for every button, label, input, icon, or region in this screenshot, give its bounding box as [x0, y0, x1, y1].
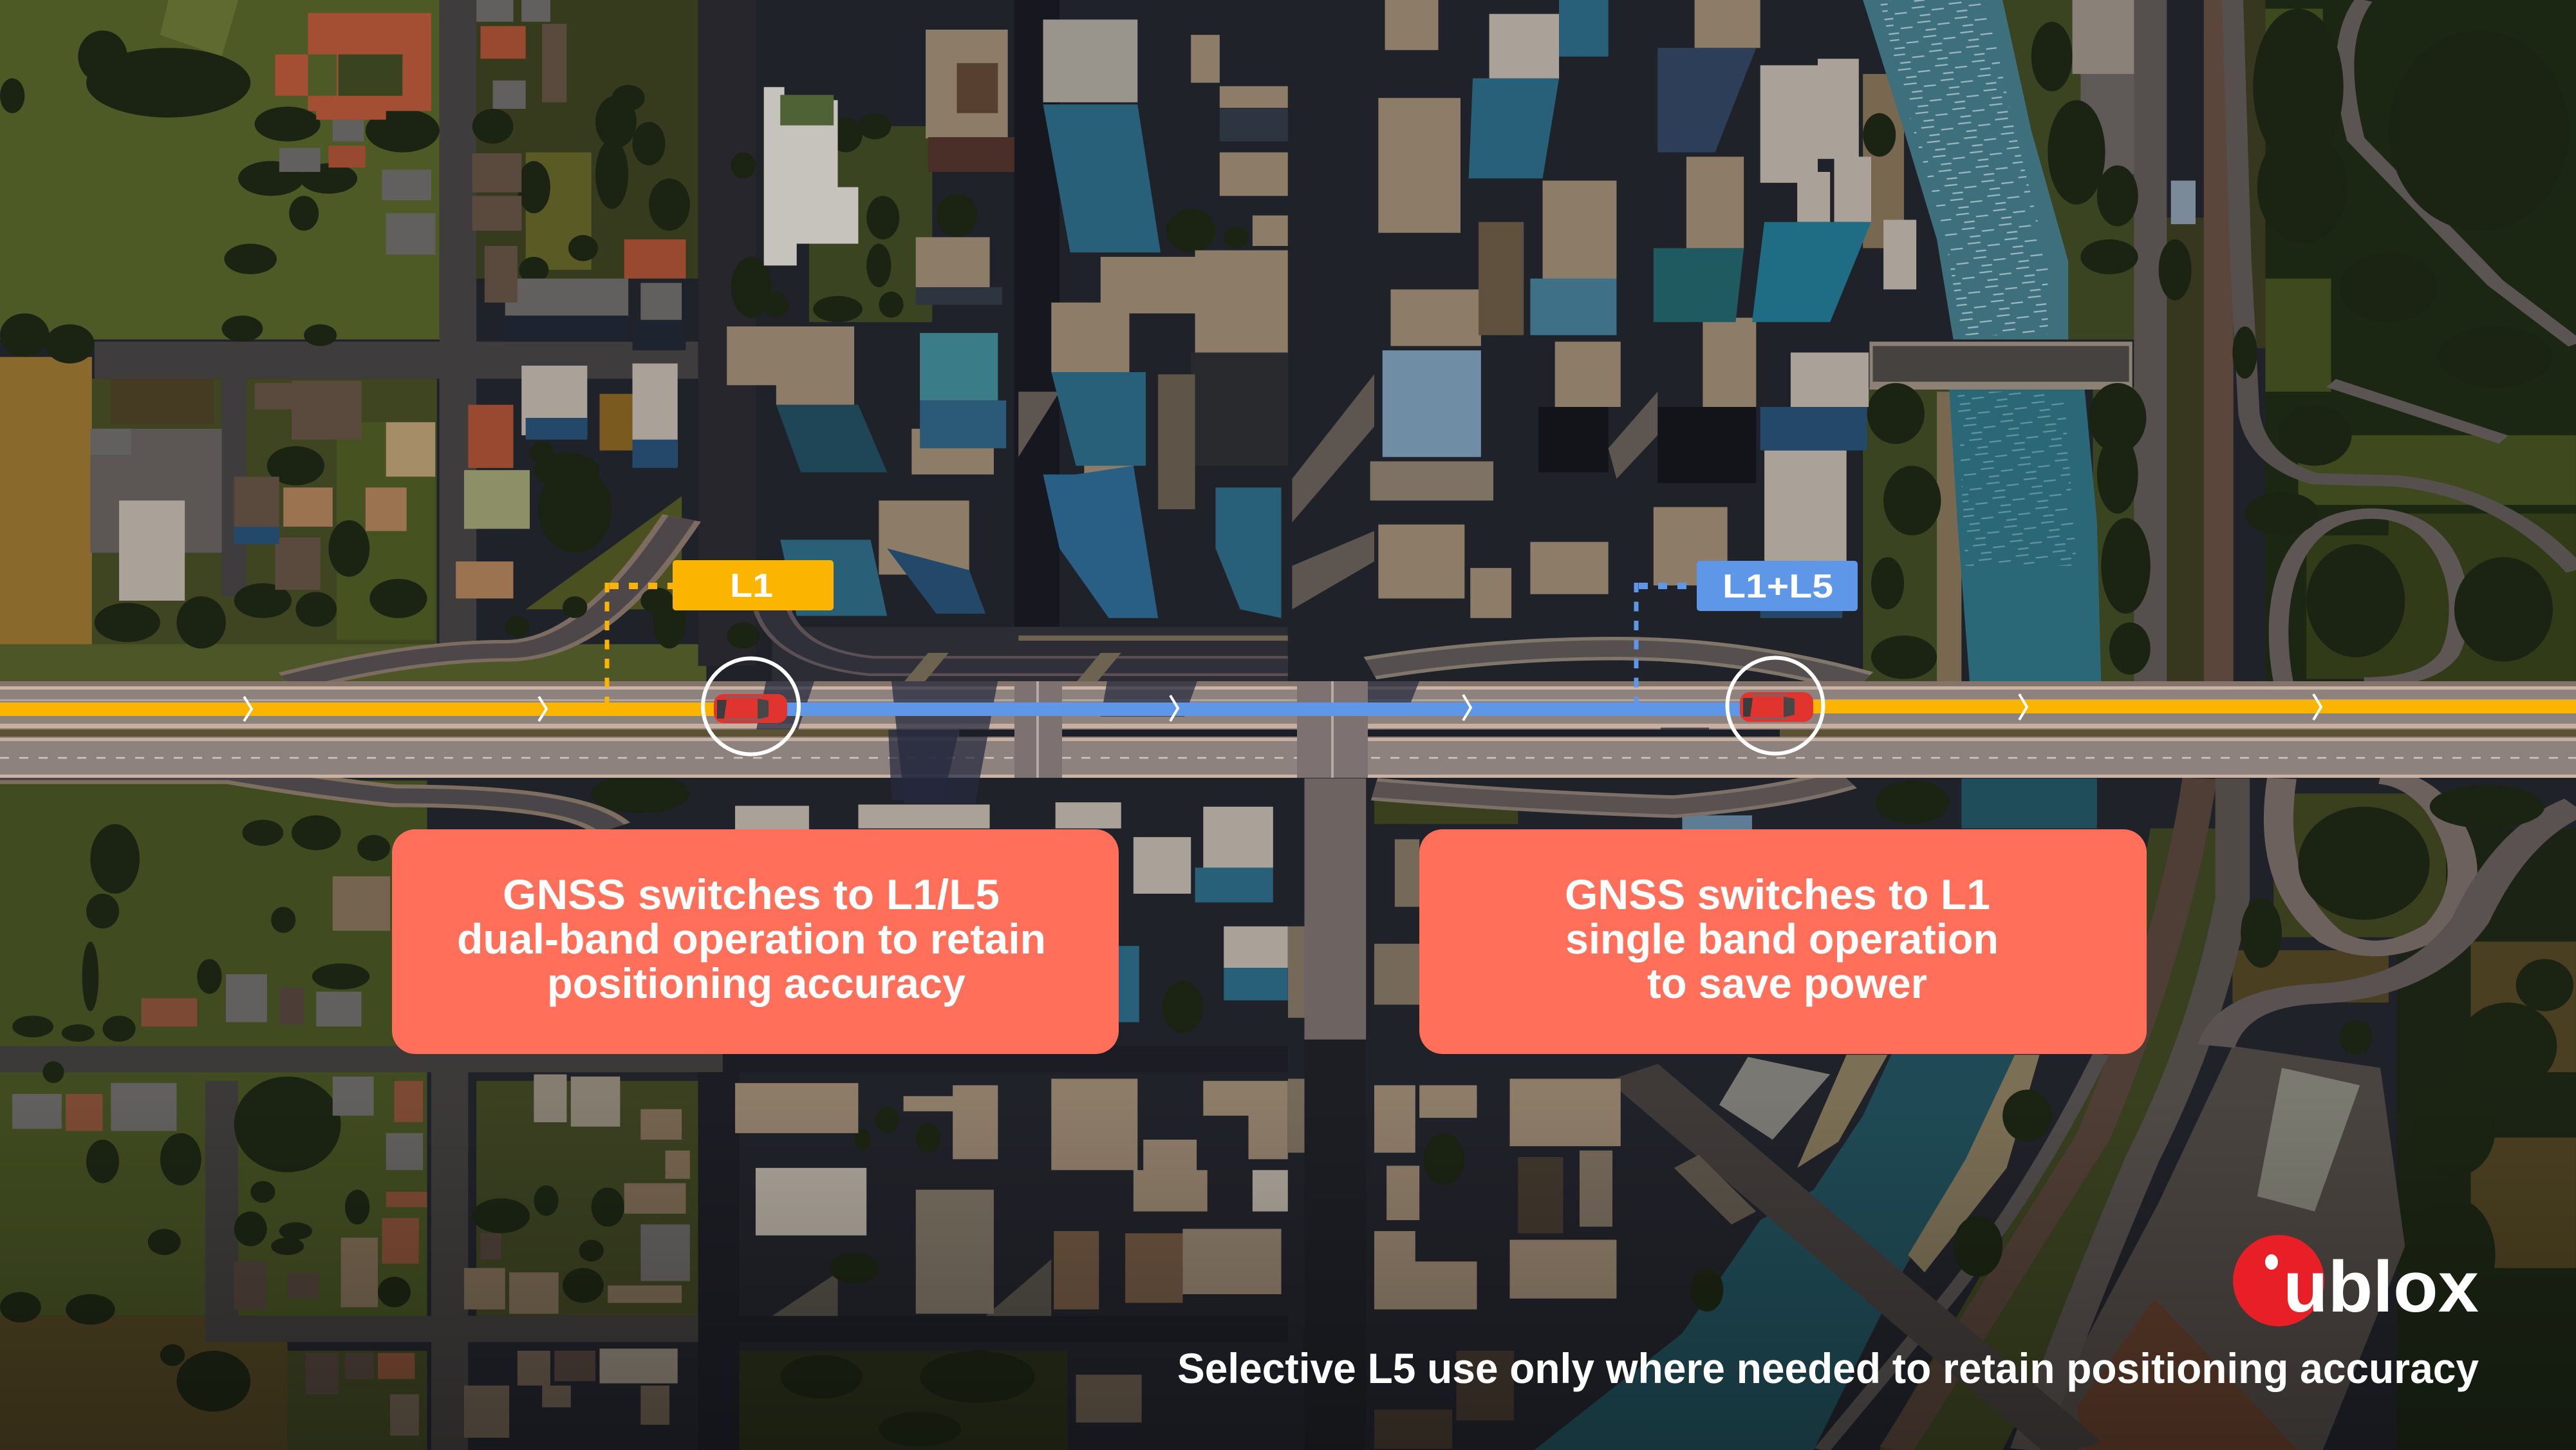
suburban houses	[275, 13, 431, 120]
callout: switch to single band	[1419, 829, 2147, 1054]
ring around left car	[703, 658, 799, 755]
high-rise roofs	[1378, 0, 1760, 618]
bridge	[1869, 342, 2133, 390]
background: north-east downtown, river and forest	[1292, 0, 2576, 683]
roads	[95, 0, 698, 644]
label: L1: L1	[730, 567, 773, 605]
callout: switch to single band: to save power	[1647, 959, 1927, 1007]
city blocks	[735, 1078, 1288, 1212]
callout: switch to dual-band: dual-band operation to retain	[457, 915, 1046, 963]
houses	[12, 974, 690, 1281]
rail and roads	[1880, 829, 2225, 1450]
sunlit shadows gap	[1292, 374, 1657, 609]
background: north-west suburb and downtown	[0, 0, 1288, 683]
ring around right car	[1728, 658, 1823, 753]
logo: ublox: ublox	[2283, 1247, 2479, 1327]
label: L1	[673, 560, 834, 610]
callout: switch to single band: single band operation	[1565, 915, 1999, 963]
lower river	[1535, 1054, 2015, 1450]
callout: switch to dual-band: GNSS switches to L1/L5	[503, 871, 1000, 918]
building shadows on highway	[756, 681, 1709, 804]
label: L1+L5	[1697, 561, 1858, 611]
cross streets over highway	[1014, 681, 1368, 778]
ramp in north	[1370, 648, 1863, 683]
east bank park	[1863, 0, 2151, 683]
warehouse and brown roof	[2257, 1068, 2360, 1212]
direction chevrons	[244, 694, 2321, 721]
interchange loops	[2279, 777, 2463, 948]
trees	[0, 774, 1203, 1447]
background: south-east downtown, river and rail	[1288, 777, 2576, 1450]
darkening gradient at the bottom	[0, 1095, 2576, 1450]
background: south-west suburb and downtown	[0, 773, 1288, 1450]
callout: switch to single band: GNSS switches to L1	[1565, 871, 1990, 918]
connector: L1 label to route	[607, 583, 673, 702]
car icon: left, switching to dual band	[714, 694, 787, 723]
logo: ublox	[2233, 1235, 2479, 1327]
caption: Selective L5 use only where needed to retain positioning accuracy	[1177, 1344, 2479, 1392]
east roads and rail	[2080, 44, 2142, 174]
L1+L5 signal path: blue segment	[752, 702, 1775, 716]
connector: L1+L5 label to route	[1636, 583, 1697, 702]
forest	[2265, 0, 2576, 683]
label: L1+L5: L1+L5	[1722, 568, 1833, 605]
diagonal bridge	[1633, 1072, 2077, 1450]
callout: switch to dual-band: positioning accuracy	[547, 959, 966, 1007]
L1 signal path: right yellow segment	[1775, 700, 2576, 713]
trees	[0, 30, 1249, 648]
callout: switch to dual-band	[392, 829, 1119, 1054]
river	[1863, 0, 2101, 683]
city blocks	[1374, 1078, 1621, 1310]
car icon: right, switching to single band	[1740, 692, 1813, 722]
trees	[1424, 780, 2573, 1312]
L1 signal path: left yellow segment	[0, 702, 752, 716]
forest trees	[1863, 9, 2570, 679]
downtown buildings	[764, 87, 858, 265]
south-west ramp	[0, 773, 612, 829]
main highway	[0, 681, 2576, 804]
